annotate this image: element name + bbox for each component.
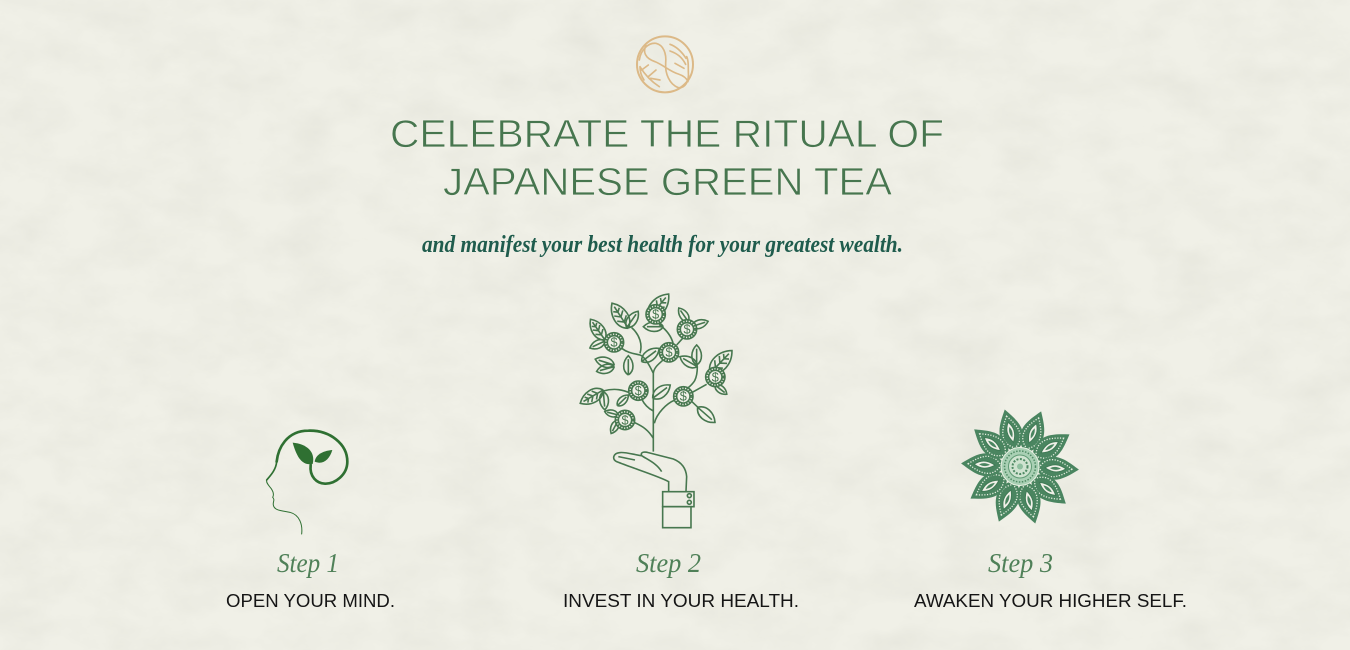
icon: money tree in hand bbox=[577, 289, 737, 528]
icon: gold leaf logo bbox=[637, 36, 693, 92]
coins: $ bbox=[683, 323, 691, 337]
small leaf bbox=[315, 450, 332, 463]
coins: $ bbox=[635, 384, 642, 398]
step 3 label: AWAKEN YOUR HIGHER SELF. bbox=[914, 591, 1187, 611]
step 1 heading: Step 1 bbox=[277, 548, 339, 578]
step 2 bbox=[563, 548, 799, 611]
cuff bbox=[663, 492, 694, 528]
subtitle: and manifest your best health for your greatest wealth. bbox=[422, 232, 903, 258]
coins: $ bbox=[712, 370, 719, 384]
step 1 label: OPEN YOUR MIND. bbox=[226, 591, 395, 611]
step 2 label: INVEST IN YOUR HEALTH. bbox=[563, 591, 799, 611]
step 1 bbox=[226, 548, 395, 611]
step 3 bbox=[914, 548, 1187, 611]
petals bbox=[960, 407, 1080, 526]
coins bbox=[604, 305, 725, 430]
coins: $ bbox=[665, 346, 673, 360]
coins: $ bbox=[680, 390, 687, 404]
coins: $ bbox=[621, 413, 629, 427]
title bbox=[390, 113, 944, 204]
step 3 heading: Step 3 bbox=[988, 548, 1053, 578]
title: JAPANESE GREEN TEA bbox=[443, 161, 892, 204]
coins: $ bbox=[652, 308, 659, 322]
coins: $ bbox=[610, 336, 618, 350]
mandala centre bbox=[1001, 448, 1039, 486]
hand bbox=[614, 452, 687, 492]
title: CELEBRATE THE RITUAL OF bbox=[390, 113, 944, 156]
icon: head with sprout bbox=[267, 431, 347, 534]
icon: mandala flower bbox=[960, 407, 1080, 526]
leaves bbox=[577, 289, 737, 435]
large leaf bbox=[293, 443, 313, 464]
stems bbox=[603, 324, 707, 452]
step 2 heading: Step 2 bbox=[636, 548, 701, 578]
